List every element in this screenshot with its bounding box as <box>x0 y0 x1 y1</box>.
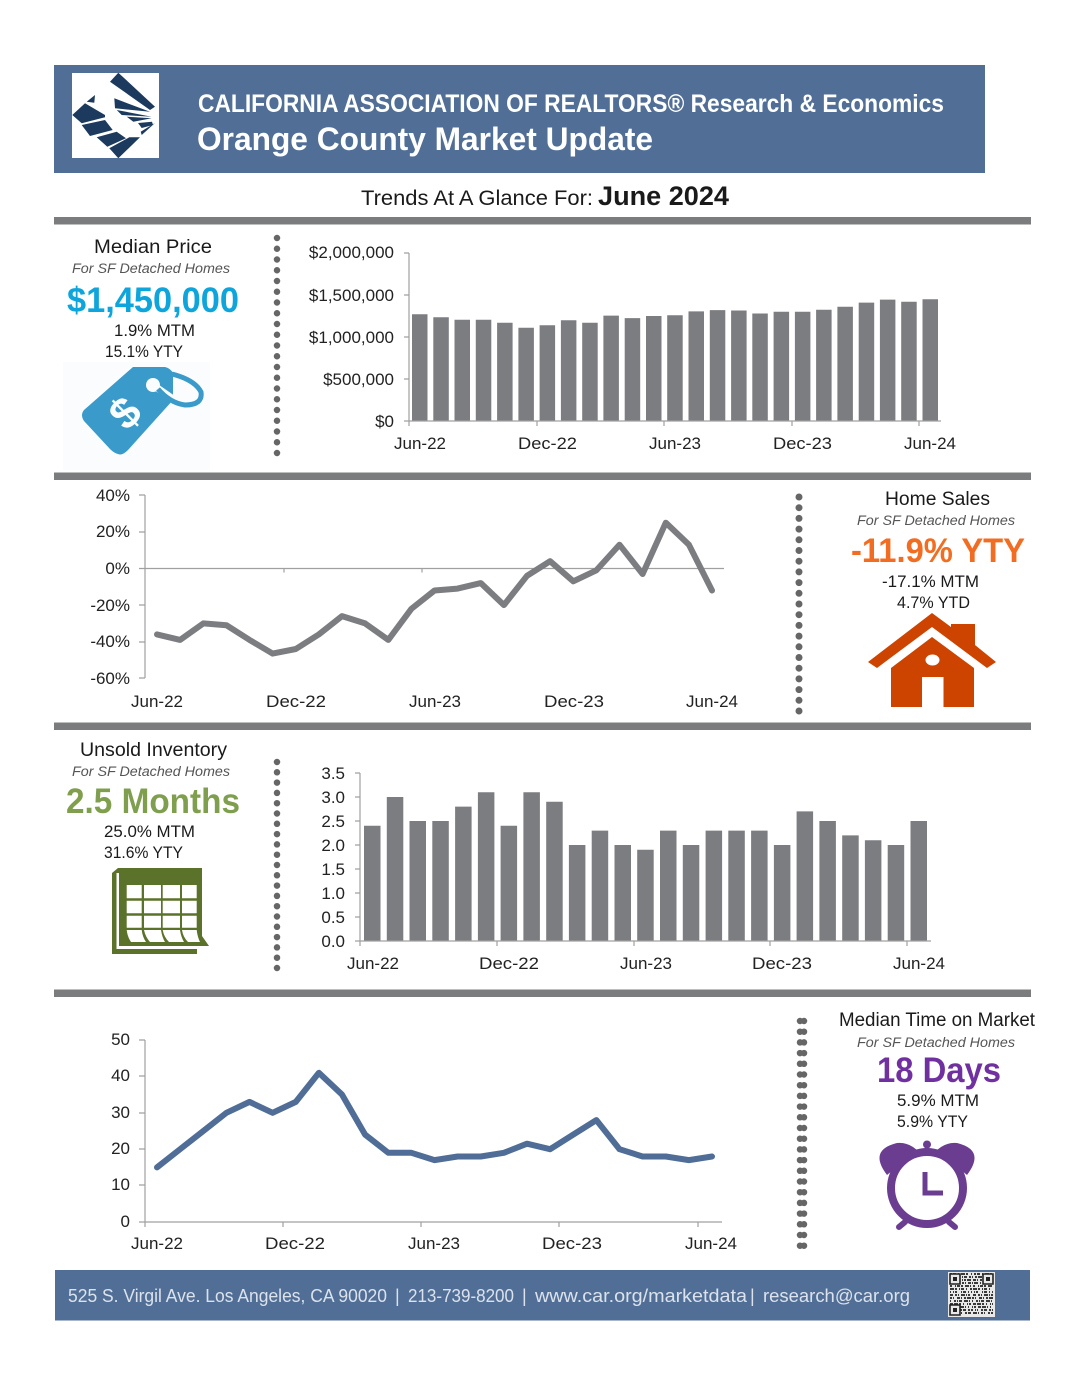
panel: home sales <box>851 489 1025 707</box>
median price subheading: For SF Detached Homes <box>72 261 230 276</box>
chart: median price bars: Dec-23 <box>773 434 832 453</box>
chart: median time on market line: 20 <box>111 1139 130 1158</box>
chart: unsold inventory bars: Dec-23 <box>752 954 812 973</box>
chart: unsold inventory bars: 3.5 <box>321 764 345 783</box>
logo: California Association of Realtors <box>72 73 159 158</box>
chart: median time on market line: 50 <box>111 1030 130 1049</box>
chart: median price bars: Jun-22 <box>394 434 446 453</box>
chart: unsold inventory bars: Jun-22 <box>347 954 399 973</box>
chart: median time on market line: Dec-22 <box>265 1234 325 1253</box>
panel: unsold inventory <box>66 740 240 954</box>
time on market changes: 5.9% MTM <box>897 1091 979 1110</box>
chart: unsold inventory bars: 2.0 <box>321 836 345 855</box>
divider dots <box>274 238 280 455</box>
icon: house <box>868 613 996 707</box>
footer contact text: 213-739-8200 <box>408 1286 514 1306</box>
footer contact text: research@car.org <box>763 1286 910 1306</box>
inventory value: 2.5 Months <box>66 782 240 821</box>
divider dots <box>796 497 802 712</box>
home sales changes <box>882 572 979 612</box>
chart: unsold inventory bars: 3.0 <box>321 788 345 807</box>
chart: home sales line: 40% <box>96 486 130 505</box>
chart: unsold inventory bars: Jun-23 <box>620 954 672 973</box>
chart: unsold inventory bars: 0.5 <box>321 908 345 927</box>
icon: price tag <box>63 362 210 470</box>
chart: unsold inventory bars: Dec-22 <box>479 954 539 973</box>
chart: median price bars: Jun-23 <box>649 434 701 453</box>
median price changes: 15.1% YTY <box>105 342 183 361</box>
panel: median time on market <box>839 1010 1036 1227</box>
chart: median time on market line: Jun-22 <box>131 1234 183 1253</box>
time on market changes: 5.9% YTY <box>897 1112 968 1131</box>
chart: unsold inventory bars: 2.5 <box>321 812 345 831</box>
chart: median time on market line: 10 <box>111 1175 130 1194</box>
icon: alarm clock <box>879 1140 975 1227</box>
home sales value: -11.9% YTY <box>851 532 1025 570</box>
chart: median time on market line <box>111 1030 737 1253</box>
panel: median price <box>63 237 239 470</box>
time on market changes <box>897 1091 979 1131</box>
footer contact text: | <box>395 1286 400 1306</box>
home sales changes: -17.1% MTM <box>882 572 979 591</box>
chart: median price bars: $500,000 <box>323 370 394 389</box>
chart: median price bars: $2,000,000 <box>309 243 394 262</box>
inventory heading: Unsold Inventory <box>80 740 228 761</box>
chart: median time on market line: Jun-24 <box>685 1234 737 1253</box>
chart: median time on market line: Jun-23 <box>408 1234 460 1253</box>
time on market heading: Median Time on Market <box>839 1010 1036 1031</box>
chart: median price bars: $0 <box>375 412 394 431</box>
divider dots <box>274 762 280 968</box>
chart: home sales line: -60% <box>90 669 130 688</box>
subtitle: Trends At A Glance For: <box>361 187 593 210</box>
subtitle: June 2024 <box>598 181 729 211</box>
chart: unsold inventory bars: 0.0 <box>321 932 345 951</box>
chart: home sales line: Jun-23 <box>409 692 461 711</box>
median price changes: 1.9% MTM <box>114 321 195 340</box>
chart: unsold inventory bars: 1.5 <box>321 860 345 879</box>
chart: home sales line: Jun-24 <box>686 692 738 711</box>
footer contact text <box>68 1286 910 1306</box>
chart: home sales line <box>90 486 738 711</box>
home sales subheading: For SF Detached Homes <box>857 513 1015 528</box>
inventory changes <box>104 822 195 862</box>
inventory changes: 25.0% MTM <box>104 822 195 841</box>
chart: home sales line: -20% <box>90 596 130 615</box>
header line 2: Orange County Market Update <box>197 121 653 157</box>
chart: median price bars: Jun-24 <box>904 434 956 453</box>
chart: unsold inventory bars <box>321 764 945 973</box>
chart: home sales line: Dec-22 <box>266 692 326 711</box>
chart: median price bars: $1,500,000 <box>309 286 394 305</box>
chart: unsold inventory bars: Jun-24 <box>893 954 945 973</box>
home sales changes: 4.7% YTD <box>897 593 970 612</box>
chart: home sales line: Dec-23 <box>544 692 604 711</box>
footer bar <box>55 1270 1030 1320</box>
icon: price tag: $ <box>99 387 151 439</box>
footer contact text: | <box>522 1286 527 1306</box>
footer contact text: www.car.org/marketdata <box>534 1286 748 1306</box>
footer contact text: | <box>750 1286 755 1306</box>
median price heading: Median Price <box>94 237 212 258</box>
time on market subheading: For SF Detached Homes <box>857 1035 1015 1050</box>
chart: home sales line: Jun-22 <box>131 692 183 711</box>
header banner <box>54 65 985 173</box>
median price changes <box>105 321 195 361</box>
median price value: $1,450,000 <box>67 281 239 320</box>
inventory changes: 31.6% YTY <box>104 843 183 862</box>
chart: median price bars: Dec-22 <box>518 434 577 453</box>
chart: home sales line: 0% <box>105 559 130 578</box>
icon: calendar <box>112 868 209 954</box>
chart: unsold inventory bars: 1.0 <box>321 884 345 903</box>
QR code <box>948 1272 995 1317</box>
divider dots <box>800 1021 804 1248</box>
chart: median price bars: $1,000,000 <box>309 328 394 347</box>
chart: home sales line: -40% <box>90 632 130 651</box>
chart: median time on market line: 40 <box>111 1066 130 1085</box>
chart: median price bars <box>309 243 956 453</box>
subtitle <box>361 181 729 211</box>
footer contact text: 525 S. Virgil Ave. Los Angeles, CA 90020 <box>68 1286 387 1306</box>
chart: home sales line: 20% <box>96 522 130 541</box>
time on market value: 18 Days <box>877 1051 1001 1090</box>
header line 1: CALIFORNIA ASSOCIATION OF REALTORS® Research & Economics <box>198 90 944 118</box>
chart: median time on market line: Dec-23 <box>542 1234 602 1253</box>
inventory subheading: For SF Detached Homes <box>72 764 230 779</box>
chart: median time on market line: 30 <box>111 1103 130 1122</box>
chart: median time on market line: 0 <box>121 1212 130 1231</box>
home sales heading: Home Sales <box>885 489 990 510</box>
